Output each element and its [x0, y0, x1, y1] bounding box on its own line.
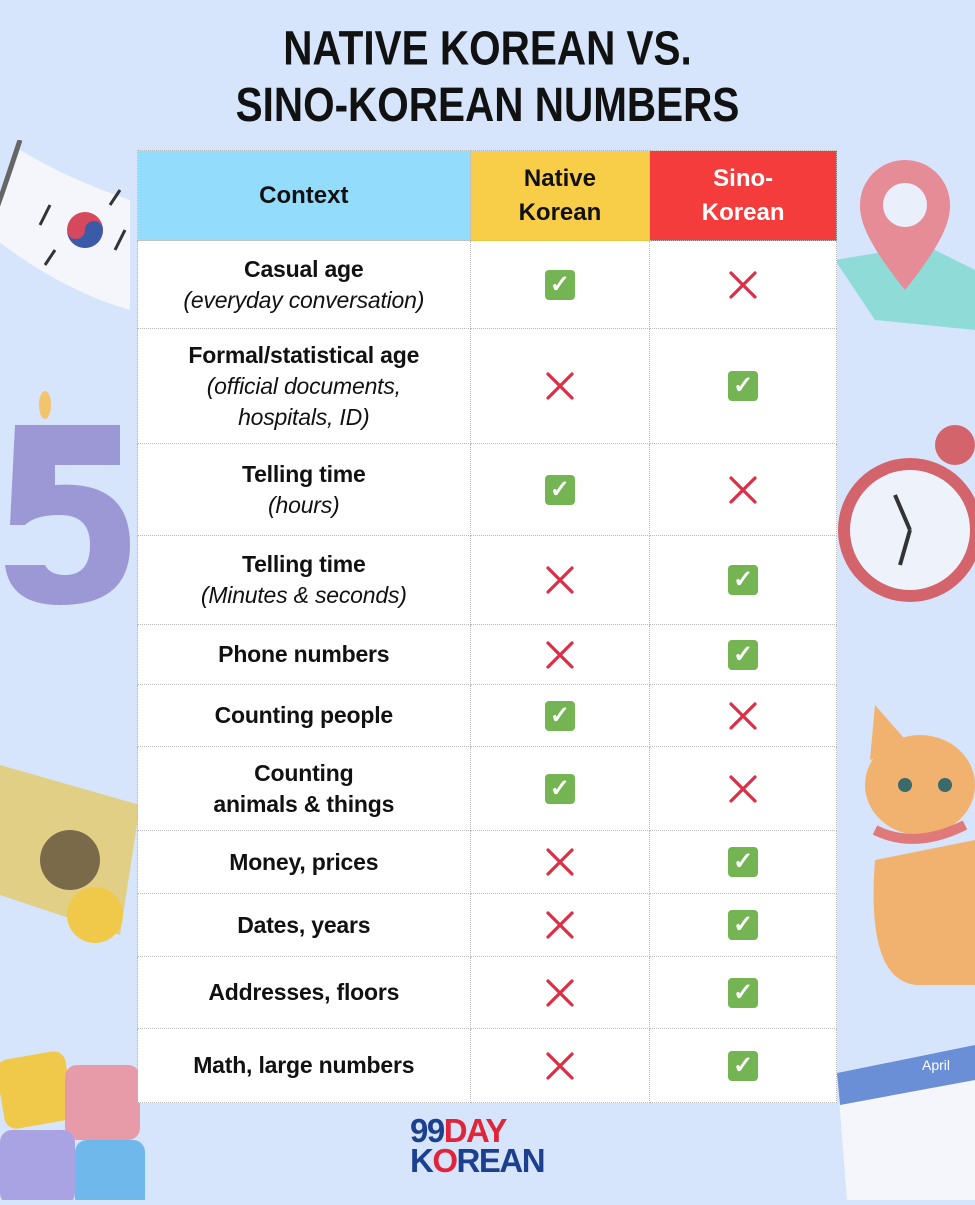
- comparison table: ✓: [550, 702, 570, 728]
- comparison table: Telling time: [242, 551, 366, 577]
- comparison table: ✓: [550, 270, 570, 298]
- comparison table: [137, 150, 837, 1103]
- decoration: candle 5: [5, 391, 130, 605]
- comparison table: Sino-: [713, 164, 773, 192]
- title: SINO-KOREAN NUMBERS: [236, 77, 739, 132]
- decoration: cat: [865, 705, 975, 986]
- comparison table: ✓: [733, 1052, 753, 1078]
- comparison table: ✓: [733, 848, 753, 875]
- comparison table: ✓: [550, 476, 570, 502]
- title: NATIVE KOREAN VS.: [283, 20, 692, 75]
- comparison table: animals & things: [213, 790, 394, 816]
- comparison table: ✓: [550, 774, 570, 802]
- logo: 90 Day Korean: [410, 1112, 544, 1179]
- comparison table: Context: [259, 182, 348, 208]
- decoration: math blocks: [0, 1051, 145, 1200]
- comparison table: Formal/statistical age: [188, 342, 419, 368]
- comparison table: ✓: [733, 566, 753, 593]
- comparison table: (Minutes & seconds): [201, 582, 407, 608]
- decoration: korean flag: [0, 140, 130, 310]
- title: [236, 20, 739, 132]
- comparison table: Korean: [519, 198, 601, 226]
- comparison table: Casual age: [244, 256, 364, 282]
- decoration: alarm clock: [838, 425, 975, 602]
- comparison table: Telling time: [242, 460, 366, 486]
- logo: 90 Day Korean: KOREAN: [410, 1142, 544, 1179]
- decoration: money: [0, 765, 138, 943]
- comparison table: Money, prices: [229, 848, 378, 874]
- comparison table: ✓: [733, 978, 753, 1006]
- comparison table: ✓: [733, 911, 753, 938]
- comparison table: Dates, years: [237, 912, 370, 938]
- comparison table: Phone numbers: [218, 641, 389, 667]
- comparison table: Counting: [254, 760, 353, 786]
- decoration: calendar: [837, 1045, 975, 1200]
- comparison table: hospitals, ID): [238, 404, 369, 430]
- comparison table: Counting people: [215, 702, 393, 728]
- logo: 90 Day Korean: 99DAY: [410, 1112, 506, 1149]
- comparison table: Korean: [702, 198, 784, 226]
- decoration: calendar: April: [922, 1057, 950, 1073]
- comparison table: Math, large numbers: [193, 1052, 414, 1078]
- comparison table: ✓: [733, 640, 753, 668]
- comparison table: Native: [524, 164, 596, 192]
- comparison table: (everyday conversation): [183, 286, 424, 312]
- comparison table: Addresses, floors: [208, 979, 399, 1005]
- decoration: map pin: [837, 160, 975, 330]
- comparison table: (official documents,: [207, 372, 401, 398]
- comparison table: ✓: [733, 372, 753, 399]
- comparison table: (hours): [268, 492, 340, 518]
